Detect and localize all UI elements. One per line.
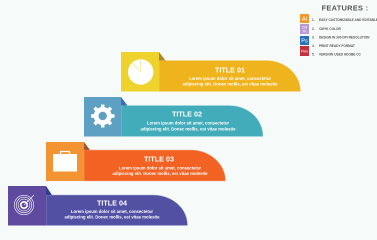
icon square [121, 52, 159, 92]
panel: title 04 [8, 186, 188, 226]
icon: PNG: PNG [301, 50, 308, 54]
body text [113, 165, 208, 176]
feature item 4: 4. [312, 44, 315, 48]
band [46, 195, 188, 226]
icon: target [14, 195, 34, 215]
features list [300, 14, 377, 56]
icon: CMYK: YK [302, 30, 307, 34]
feature item 4: PRINT READY FORMAT [319, 44, 355, 48]
icon square [46, 142, 84, 181]
icon: briefcase [53, 152, 77, 172]
feature item 5: 5. [312, 52, 315, 56]
body text [183, 76, 278, 87]
icon square [84, 97, 121, 136]
feature item 3: DESIGN IN 300 DPI RESOLUTION [319, 36, 370, 40]
panel: title 03 [46, 142, 226, 181]
body text: adipiscing elit. Donec mollis, est vitae molestie [141, 126, 236, 132]
heading: features: FEATURES : [322, 4, 368, 12]
panel: title 01 [121, 52, 300, 92]
feature item 2: CMYK COLOR [319, 27, 341, 31]
icon: gear [91, 104, 114, 128]
feature item 3: 3. [312, 36, 315, 40]
body text: adipiscing elit. Donec mollis, est vitae molestie [183, 82, 278, 87]
panel: title 02 [84, 97, 263, 136]
band [159, 60, 300, 92]
body text [65, 209, 160, 220]
body text: Lorem ipsum dolor sit amet, consectetur [71, 209, 153, 214]
icon: AI: Ai [302, 16, 307, 22]
icon: CMYK: CM [302, 26, 307, 30]
band [84, 150, 226, 181]
icon square [8, 186, 46, 226]
feature item 5: VERSION USED ADOBE CC [319, 52, 362, 56]
title: TITLE 01 [215, 66, 245, 74]
feature item 1: 1. [312, 18, 315, 22]
band [121, 106, 263, 136]
icon: CMYK [300, 24, 309, 34]
feature item 2: 2. [312, 27, 315, 31]
fold [159, 52, 166, 60]
fold [121, 97, 128, 106]
body text: Lorem ipsum dolor sit amet, consectetur [119, 165, 201, 170]
body text: Lorem ipsum dolor sit amet, consectetur [189, 76, 271, 81]
body text: Lorem ipsum dolor sit amet, consectetur [147, 121, 229, 126]
title: TITLE 03 [144, 154, 174, 164]
body text: adipiscing elit. Donec mollis, est vitae molestie [113, 171, 208, 176]
body text [141, 121, 236, 132]
fold [84, 142, 90, 150]
feature item 1: EASY CUSTOMIZABLE AND EDITABLE [319, 18, 377, 22]
title: TITLE 04 [97, 198, 127, 208]
title: TITLE 02 [172, 110, 202, 119]
body text: adipiscing elit. Donec mollis, est vitae molestie [65, 215, 160, 220]
icon: pie chart [128, 58, 153, 85]
fold [46, 186, 52, 195]
icon: Ps: Ps [301, 38, 308, 44]
